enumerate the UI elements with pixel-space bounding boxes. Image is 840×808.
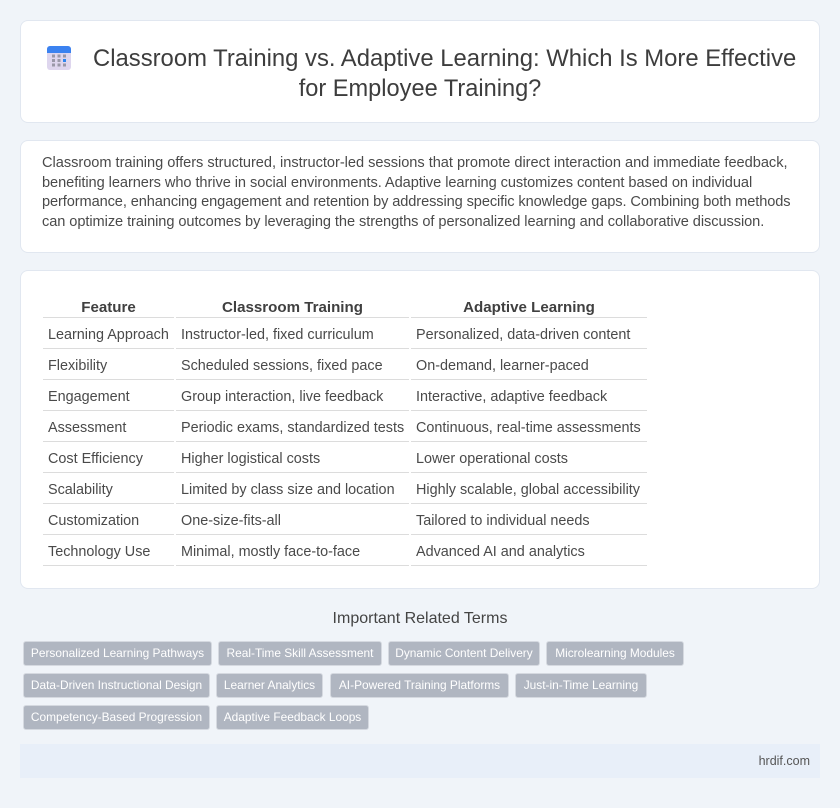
comparison table: Continuous, real-time assessments	[416, 420, 641, 436]
comparison table: Scalability	[48, 482, 113, 498]
related terms heading: Important Related Terms	[333, 610, 507, 627]
title: for Employee Training?	[299, 76, 541, 102]
header card	[20, 20, 820, 123]
comparison table: Tailored to individual needs	[416, 513, 590, 529]
comparison table: Flexibility	[48, 358, 107, 374]
comparison table: Group interaction, live feedback	[181, 389, 383, 405]
panel: table card	[20, 270, 820, 589]
related terms tags: Competency-Based Progression	[31, 710, 202, 724]
footer source: hrdif.com	[759, 754, 810, 768]
intro text: performance, enhancing engagement and retention by addressing specific knowledge gaps. Combining both methods	[42, 194, 790, 210]
related terms tags: Microlearning Modules	[555, 646, 675, 660]
comparison table: Advanced AI and analytics	[416, 544, 585, 560]
related terms tags: Dynamic Content Delivery	[395, 646, 533, 660]
comparison table: Adaptive Learning	[463, 299, 595, 316]
intro text: benefiting learners who thrive in social environments. Adaptive learning customizes content based on individual	[42, 175, 752, 191]
related terms tags: Data-Driven Instructional Design	[31, 678, 202, 692]
footer bar	[20, 744, 820, 778]
comparison table: Highly scalable, global accessibility	[416, 482, 640, 498]
intro text: can optimize training outcomes by leveraging the strengths of personalized learning and collaborative discussion.	[42, 214, 764, 230]
comparison table	[43, 299, 647, 566]
comparison table: On-demand, learner-paced	[416, 358, 589, 374]
related terms tags	[23, 641, 684, 730]
related terms tags: AI-Powered Training Platforms	[339, 678, 500, 692]
comparison table: Limited by class size and location	[181, 482, 395, 498]
related terms tags: Real-Time Skill Assessment	[227, 646, 373, 660]
related terms tags: Adaptive Feedback Loops	[224, 710, 361, 724]
icon: calendar	[47, 46, 71, 70]
comparison table: Feature	[81, 299, 136, 316]
comparison table: Assessment	[48, 420, 126, 436]
comparison table: Higher logistical costs	[181, 451, 320, 467]
related terms tags: Personalized Learning Pathways	[31, 646, 204, 660]
comparison table: Interactive, adaptive feedback	[416, 389, 607, 405]
comparison table: Periodic exams, standardized tests	[181, 420, 404, 436]
comparison table: Minimal, mostly face-to-face	[181, 544, 360, 560]
intro text	[42, 155, 790, 230]
comparison table: Customization	[48, 513, 139, 529]
comparison table: Learning Approach	[48, 327, 169, 343]
comparison table: Personalized, data-driven content	[416, 327, 630, 343]
title	[93, 45, 796, 102]
comparison table: One-size-fits-all	[181, 513, 281, 529]
comparison table: Scheduled sessions, fixed pace	[181, 358, 383, 374]
comparison table: Engagement	[48, 389, 130, 405]
comparison table: Classroom Training	[222, 299, 363, 316]
intro text: Classroom training offers structured, instructor-led sessions that promote direct interaction and immediate feedback,	[42, 155, 788, 171]
panel: intro card	[20, 140, 820, 253]
comparison table: Instructor-led, fixed curriculum	[181, 327, 374, 343]
title: Classroom Training vs. Adaptive Learning: Which Is More Effective	[93, 45, 796, 72]
comparison table: Technology Use	[48, 544, 150, 560]
comparison table: Cost Efficiency	[48, 451, 143, 467]
comparison table: Lower operational costs	[416, 451, 568, 467]
related terms tags: Just-in-Time Learning	[524, 678, 638, 692]
related terms tags: Learner Analytics	[224, 678, 315, 692]
